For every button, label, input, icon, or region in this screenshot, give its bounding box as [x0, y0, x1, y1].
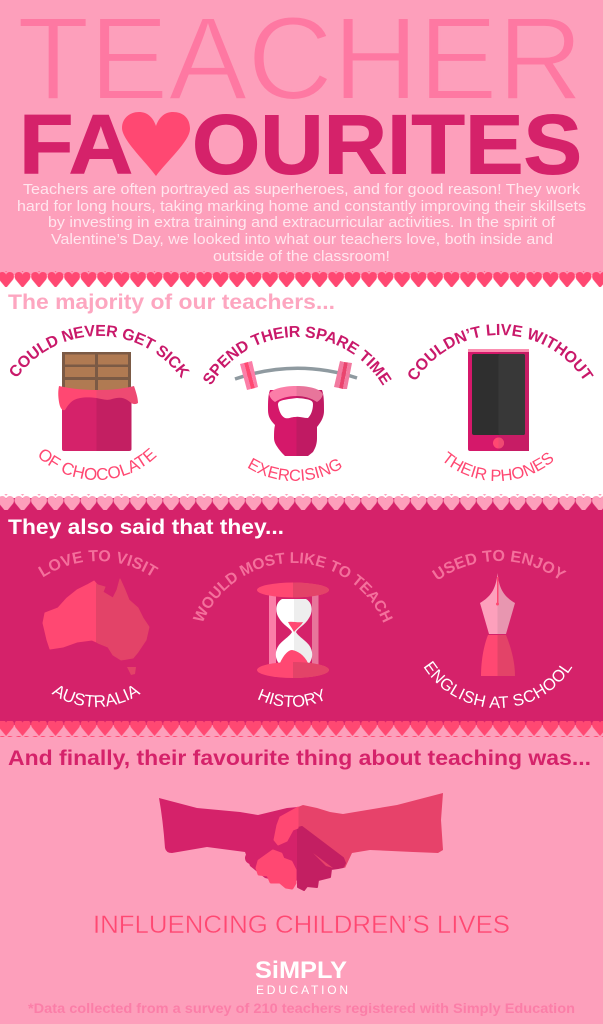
icon: kettlebell [268, 386, 324, 456]
logo: Simply Education: EDUCATION [256, 983, 348, 997]
intro text: by investing in extra training and extracurricular activities. In the spirit of [48, 214, 556, 231]
arc label: their phones: THEIR PHONES [444, 451, 554, 481]
heading: The majority of our teachers... [8, 290, 335, 314]
intro text: Teachers are often portrayed as superheroes, and for good reason! They work [23, 181, 581, 198]
heart border: red [0, 721, 603, 737]
title: FAVOURITES: FA [19, 98, 133, 192]
heading: And finally, their favourite thing about teaching was... [8, 746, 591, 770]
intro text: outside of the classroom! [213, 248, 390, 265]
statement: influencing children's lives: INFLUENCING CHILDREN’S LIVES [93, 911, 510, 939]
icon: hourglass [257, 582, 329, 678]
arc label: english at school: ENGLISH AT SCHOOL [424, 660, 572, 708]
arc label: australia: AUSTRALIA [52, 686, 141, 708]
panel: the majority of our teachers [0, 271, 603, 498]
arc label: love to visit: LOVE TO VISIT [38, 550, 158, 577]
arc label: would most like to teach: WOULD MOST LIKE TO TEACH [192, 552, 393, 622]
panel: header background [0, 0, 603, 275]
logo: Simply Education: SiMPLY [255, 957, 347, 984]
footnote: *Data collected from a survey of 210 teachers registered with Simply Education [28, 1000, 575, 1016]
intro text [17, 181, 586, 265]
icon: phone [468, 349, 529, 451]
intro text: hard for long hours, taking marking home and constantly improving their skillsets [17, 198, 586, 215]
arc label: used to enjoy: USED TO ENJOY [432, 550, 566, 580]
icon: chocolate bar [58, 352, 138, 451]
heart border: pale pink [0, 494, 603, 510]
arc label: spend their spare time: SPEND THEIR SPARE TIME [203, 326, 392, 386]
arc label: couldn't live without: COULDN’T LIVE WITHOUT [408, 324, 594, 380]
icon: handshake [159, 793, 443, 890]
title: FAVOURITES: OURITES [192, 98, 582, 192]
icon: barbell [235, 361, 357, 390]
intro text: Valentine’s Day, we looked into what our teachers love, both inside and [51, 231, 553, 248]
heart border: red [0, 271, 603, 287]
arc label: could never get sick: COULD NEVER GET SICK [10, 324, 190, 378]
arc label: exercising: EXERCISING [248, 458, 342, 481]
arc label: of chocolate: OF CHOCOLATE [39, 448, 157, 480]
logo: Simply Education [255, 957, 348, 997]
icon: fountain pen [480, 573, 515, 676]
icon: Australia map [43, 579, 149, 675]
arc label: history: HISTORY [258, 688, 323, 707]
panel: they also said that they [0, 494, 603, 725]
heading: They also said that they... [8, 515, 284, 539]
icon: heart [122, 112, 190, 176]
panel: favourite thing about teaching [0, 721, 603, 1024]
title: FAVOURITES [19, 98, 582, 192]
